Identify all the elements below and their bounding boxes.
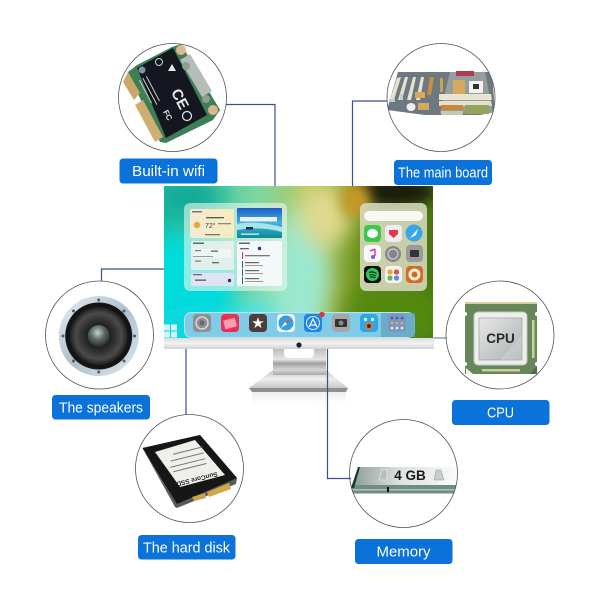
circle outline	[136, 414, 244, 522]
icon: spotify	[364, 266, 381, 283]
label: the speakers: The speakers	[59, 400, 143, 416]
wifi card image	[123, 44, 220, 143]
label: memory: Memory	[376, 544, 431, 560]
icon: app store	[304, 312, 325, 332]
icon: safari	[406, 224, 422, 242]
dock	[184, 312, 415, 338]
icon: safari	[277, 314, 295, 332]
label: CPU: CPU	[487, 404, 514, 422]
webcam	[296, 342, 302, 348]
SSD image: SunCore SSD	[175, 470, 218, 487]
label: the hard disk: The hard disk	[143, 540, 230, 556]
component: wifi card	[118, 44, 226, 152]
component: speakers	[46, 281, 154, 389]
icon: photos	[385, 266, 402, 283]
module capacity text: 4 GB	[394, 468, 426, 483]
label: built-in wifi: Built-in wifi	[132, 163, 205, 180]
label: the main board	[394, 160, 492, 185]
icon: launchpad	[388, 314, 406, 332]
icon: camera	[332, 314, 350, 332]
circle outline	[46, 281, 154, 389]
wifi card image: FC	[161, 108, 174, 122]
circle outline	[387, 44, 495, 152]
screen wallpaper	[164, 186, 433, 338]
main board image	[387, 71, 495, 115]
label: the hard disk	[138, 535, 236, 560]
connector: main board to monitor	[352, 101, 387, 186]
circle outline	[118, 44, 226, 152]
calendar widget	[237, 241, 282, 286]
connector: wifi to monitor	[226, 104, 275, 186]
connector: speakers to monitor	[102, 269, 165, 281]
label: CPU	[452, 400, 550, 425]
connector: hard disk to monitor	[185, 349, 187, 415]
wifi card image: CE	[167, 86, 192, 112]
app panel	[360, 203, 427, 291]
label: memory	[355, 539, 452, 564]
component: main board	[387, 44, 495, 152]
windows logo	[164, 324, 177, 338]
component: memory	[350, 420, 458, 528]
component: CPU	[446, 281, 554, 389]
icon: podcast	[406, 266, 423, 283]
icon: settings	[385, 246, 401, 262]
icon: music	[364, 245, 381, 262]
monitor	[164, 186, 434, 398]
icon: camera	[406, 245, 423, 262]
photo widget	[237, 208, 282, 238]
label: built-in wifi	[120, 158, 218, 184]
circle outline	[350, 420, 458, 528]
component: hard disk	[136, 414, 244, 522]
icon: bird app	[360, 314, 378, 332]
label: the main board: The main board	[398, 164, 488, 182]
icon: settings	[193, 314, 211, 332]
connector: CPU to monitor	[433, 337, 447, 339]
monitor bezel	[164, 338, 434, 349]
icon: news	[221, 314, 239, 332]
icon: messages	[364, 225, 381, 242]
circle outline	[446, 281, 554, 389]
widget panel	[184, 203, 287, 291]
speaker image	[59, 296, 139, 376]
label: the speakers	[52, 395, 150, 420]
chip text: CPU	[486, 331, 515, 346]
stocks widget	[191, 241, 234, 270]
small widget	[191, 273, 234, 286]
monitor stand	[249, 349, 348, 404]
weather widget: 72°	[205, 222, 216, 230]
connector: memory to monitor	[328, 349, 351, 478]
icon: pocket	[385, 225, 402, 242]
icon: favourites: ★	[251, 315, 265, 332]
